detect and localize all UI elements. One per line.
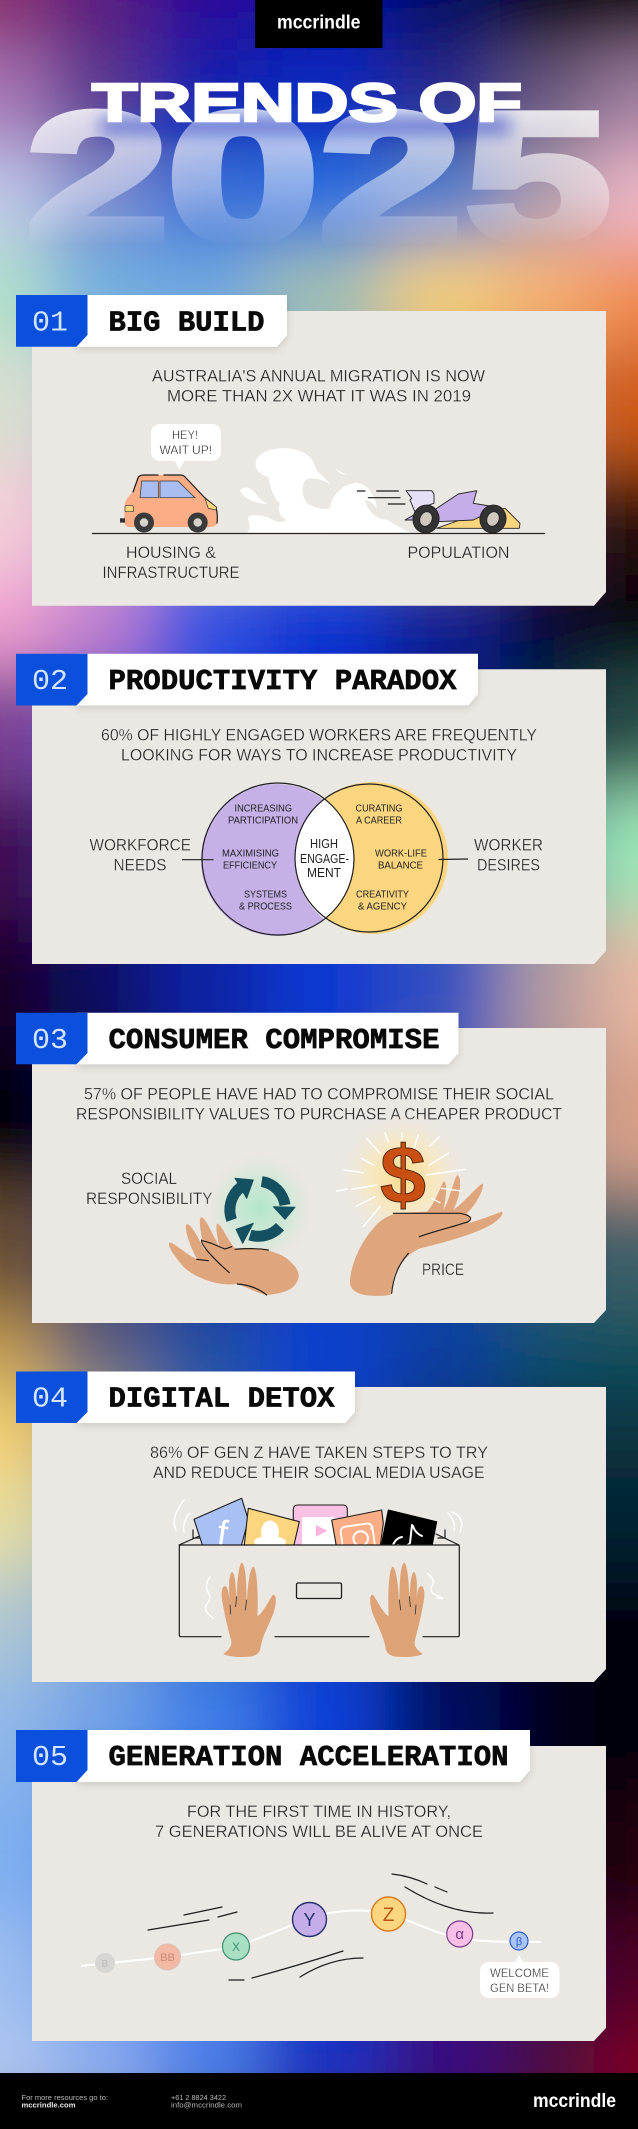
venn centre label: ENGAGE- <box>300 851 349 866</box>
node: gen x <box>222 1933 250 1960</box>
venn right labels <box>356 803 427 912</box>
statement text: AUSTRALIA'S ANNUAL MIGRATION IS NOW <box>152 368 485 386</box>
label: worker desires <box>438 836 543 874</box>
box front <box>179 1545 459 1637</box>
statement text: RESPONSIBILITY VALUES TO PURCHASE A CHEAPER PRODUCT <box>76 1105 562 1123</box>
smoke cloud <box>240 448 412 533</box>
header 03: 03 <box>32 1024 68 1057</box>
statement text: FOR THE FIRST TIME IN HISTORY, <box>187 1803 451 1821</box>
statement text <box>152 368 485 406</box>
card: instagram <box>332 1510 383 1557</box>
node: gen alpha <box>447 1921 473 1947</box>
statement text <box>155 1803 483 1841</box>
icon: recycle arrows <box>230 1178 295 1243</box>
statement text: MORE THAN 2X WHAT IT WAS IN 2019 <box>167 388 471 406</box>
node: gen beta: β <box>516 1936 522 1948</box>
footer resources: For more resources go to: <box>22 2093 108 2102</box>
timeline curve <box>81 1911 541 1966</box>
label: housing and infrastructure: INFRASTRUCTURE <box>102 564 240 582</box>
header 03 <box>16 1013 458 1064</box>
label: social responsibility: SOCIAL <box>121 1170 177 1188</box>
venn right labels: CURATING <box>356 803 402 815</box>
card: facebook <box>194 1498 248 1554</box>
label: workforce needs <box>90 836 214 874</box>
venn right labels: CREATIVITY <box>356 889 409 901</box>
title: 2025 faded numerals: 2 <box>26 74 169 280</box>
statement text: 86% OF GEN Z HAVE TAKEN STEPS TO TRY <box>150 1444 488 1462</box>
statement text: 60% OF HIGHLY ENGAGED WORKERS ARE FREQUENTLY <box>101 726 537 744</box>
statement text <box>150 1444 488 1482</box>
panel 04: digital detox <box>16 1372 606 1682</box>
speech bubble: welcome gen beta: GEN BETA! <box>490 1981 549 1995</box>
label: social responsibility <box>86 1170 212 1208</box>
footer contacts: +61 2 8824 3422 <box>171 2093 226 2102</box>
label: housing and infrastructure: HOUSING & <box>126 544 216 562</box>
node: gen z <box>372 1897 406 1931</box>
header 04: DIGITAL DETOX <box>108 1382 335 1416</box>
title: 2025 faded numerals <box>30 108 610 239</box>
speed lines <box>357 491 405 504</box>
icon: left hand <box>169 1217 299 1295</box>
icon: wiggle lines <box>205 1574 443 1618</box>
icon: left hand on box <box>222 1563 276 1657</box>
venn left labels: PARTICIPATION <box>228 814 298 826</box>
title: 2025 faded numerals: 5 <box>465 74 611 280</box>
icon: price glow <box>337 1111 469 1243</box>
venn diagram <box>201 782 448 936</box>
label: worker desires: WORKER <box>474 836 543 854</box>
statement text: AND REDUCE THEIR SOCIAL MEDIA USAGE <box>153 1464 484 1482</box>
header 01: 01 <box>32 306 68 340</box>
speech bubble: welcome gen beta: WELCOME <box>490 1966 549 1980</box>
panel 05: generation acceleration <box>16 1730 606 2041</box>
statement text: 7 GENERATIONS WILL BE ALIVE AT ONCE <box>155 1823 483 1841</box>
node: builders <box>95 1953 115 1973</box>
top logo tab <box>255 0 382 48</box>
icon: race car <box>405 491 520 536</box>
icon: dollar sign: $ <box>380 1130 426 1221</box>
icon: sound arcs <box>174 1500 462 1532</box>
panel 01: big build <box>16 295 606 606</box>
title: 2025 faded numerals: 2 <box>319 74 462 280</box>
statement text <box>101 726 537 764</box>
node: baby boomers: BB <box>160 1952 175 1964</box>
footer logo: mccrindle <box>533 2091 616 2112</box>
label: workforce needs: NEEDS <box>114 856 166 874</box>
card: tiktok <box>381 1510 437 1548</box>
header 03: CONSUMER COMPROMISE <box>108 1024 440 1057</box>
header 02: 02 <box>32 665 68 698</box>
venn right labels: BALANCE <box>378 859 423 871</box>
speech bubble: hey wait up: WAIT UP! <box>160 443 212 457</box>
statement text: LOOKING FOR WAYS TO INCREASE PRODUCTIVITY <box>121 746 517 764</box>
venn left labels: & PROCESS <box>239 900 292 912</box>
node: gen z: Z <box>383 1905 395 1926</box>
speech bubble: hey wait up: HEY! <box>172 428 198 442</box>
label: housing and infrastructure <box>102 544 240 582</box>
venn left labels: SYSTEMS <box>244 889 287 901</box>
venn right labels: & AGENCY <box>358 900 407 912</box>
speech bubble: welcome gen beta <box>480 1955 560 1998</box>
footer <box>0 2073 638 2129</box>
panel 03: consumer compromise <box>16 1013 606 1323</box>
footer resources: mccrindle.com <box>22 2101 76 2110</box>
header 01 <box>16 295 287 347</box>
venn left labels: EFFICIENCY <box>223 859 277 871</box>
speed strokes <box>148 1874 493 1980</box>
venn right labels: A CAREER <box>356 814 402 826</box>
statement text <box>76 1085 562 1123</box>
box back flaps <box>179 1530 459 1545</box>
node: gen y: Y <box>303 1910 316 1930</box>
header 04: 04 <box>32 1382 68 1416</box>
label: workforce needs: WORKFORCE <box>90 836 191 854</box>
header 02 <box>16 654 478 706</box>
speech bubble: hey wait up <box>151 424 221 470</box>
node: gen y <box>292 1902 326 1936</box>
venn centre label: MENT <box>307 865 341 880</box>
top logo tab: mccrindle <box>277 12 360 34</box>
label: price: PRICE <box>422 1261 464 1279</box>
venn left labels <box>222 803 298 912</box>
header 04 <box>16 1372 355 1423</box>
label: social responsibility: RESPONSIBILITY <box>86 1190 212 1208</box>
venn left labels: INCREASING <box>234 803 292 815</box>
node: gen beta <box>510 1932 528 1950</box>
icon: green glow <box>202 1150 318 1266</box>
label: population: POPULATION <box>408 544 510 562</box>
icon: right hand <box>350 1175 502 1296</box>
icon: rays <box>337 1133 465 1227</box>
label: worker desires: DESIRES <box>477 856 540 874</box>
node: builders: B <box>102 1959 109 1970</box>
venn right labels: WORK-LIFE <box>375 848 427 860</box>
node: baby boomers <box>154 1944 180 1970</box>
title: trends of: TRENDS OF <box>92 73 522 133</box>
footer contacts <box>171 2093 242 2110</box>
card: snapchat <box>244 1508 299 1548</box>
card: facebook: f <box>215 1512 231 1554</box>
footer contacts: info@mccrindle.com <box>171 2101 242 2110</box>
card: youtube <box>293 1505 347 1549</box>
ground line <box>92 532 545 534</box>
venn centre label: HIGH <box>310 836 338 851</box>
venn left labels: MAXIMISING <box>222 848 279 860</box>
header 05: GENERATION ACCELERATION <box>108 1741 508 1774</box>
header 05 <box>16 1730 530 1782</box>
header 02: PRODUCTIVITY PARADOX <box>108 665 457 698</box>
node: gen alpha: α <box>455 1926 464 1943</box>
header 01: BIG BUILD <box>108 306 264 340</box>
header 05: 05 <box>32 1741 68 1774</box>
icon: right hand on box <box>370 1563 424 1657</box>
title: 2025 faded numerals: 0 <box>167 74 319 280</box>
panel 02: productivity paradox <box>16 654 606 964</box>
footer resources <box>22 2093 108 2110</box>
icon: orange car <box>120 475 217 532</box>
venn centre label <box>300 836 349 880</box>
node: gen x: X <box>232 1940 240 1954</box>
statement text: 57% OF PEOPLE HAVE HAD TO COMPROMISE THEIR SOCIAL <box>84 1085 554 1103</box>
